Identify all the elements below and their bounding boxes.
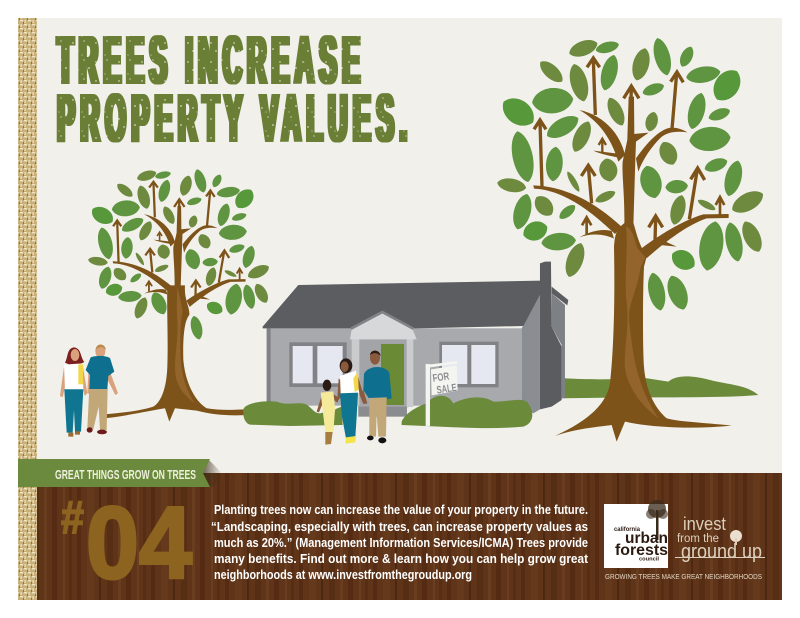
burlap strip xyxy=(18,18,37,600)
ribbon banner: GREAT THINGS GROW ON TREES xyxy=(55,468,196,482)
ribbon banner xyxy=(18,459,210,487)
shrubs xyxy=(243,396,532,428)
side walls xyxy=(522,293,565,413)
icon: small tree mark xyxy=(730,530,742,545)
logo: california urban forests council: urban xyxy=(625,530,668,547)
porch xyxy=(350,312,417,417)
woman xyxy=(60,347,87,437)
logo: invest from the ground up: ground up xyxy=(681,541,762,563)
chimney xyxy=(540,262,562,409)
tagline: GROWING TREES MAKE GREAT NEIGHBORHOODS xyxy=(605,574,762,581)
logo: california urban forests council: california xyxy=(614,527,641,533)
logo: california urban forests council xyxy=(604,500,668,568)
man xyxy=(86,344,118,434)
woman xyxy=(337,358,365,444)
for sale sign: FOR xyxy=(432,370,450,385)
body text: “Landscaping, especially with trees, can increase property values as xyxy=(211,520,588,534)
right window xyxy=(439,342,499,387)
body text: much as 20%.” (Management Information Services/ICMA) Trees provide xyxy=(214,536,588,550)
couple xyxy=(60,344,118,437)
house xyxy=(243,262,568,445)
for sale sign: SALE xyxy=(436,382,457,397)
number 04: 04 xyxy=(86,486,192,600)
background panel xyxy=(37,18,782,474)
family xyxy=(317,351,392,445)
body text: many benefits. Find out more & learn how you can help grow great xyxy=(214,552,589,566)
title: TREES INCREASE xyxy=(57,22,365,97)
ribbon shadow xyxy=(203,459,222,487)
body text: neighborhoods at www.investfromthegroudup.org xyxy=(214,568,472,582)
logo: invest from the ground up xyxy=(675,514,765,563)
wood footer band xyxy=(37,473,782,600)
icon: logo tree xyxy=(646,500,668,540)
child xyxy=(317,380,339,445)
logo: invest from the ground up: invest xyxy=(683,514,726,534)
large tree xyxy=(496,36,767,442)
body text: Planting trees now can increase the value of your property in the future. xyxy=(214,503,588,517)
logo: invest from the ground up: from the xyxy=(677,533,719,545)
front wall xyxy=(267,328,522,406)
title: PROPERTY VALUES. xyxy=(57,80,413,155)
body text xyxy=(211,503,589,582)
number 04: # xyxy=(61,491,84,543)
roof xyxy=(263,281,568,328)
small tree xyxy=(87,168,272,422)
left window xyxy=(289,342,347,387)
for sale sign xyxy=(426,361,458,426)
logo: california urban forests council: council xyxy=(639,556,659,562)
green ground strip behind large tree xyxy=(564,376,758,398)
title xyxy=(50,22,415,155)
man xyxy=(361,351,392,443)
logo: california urban forests council: forests xyxy=(615,542,668,559)
